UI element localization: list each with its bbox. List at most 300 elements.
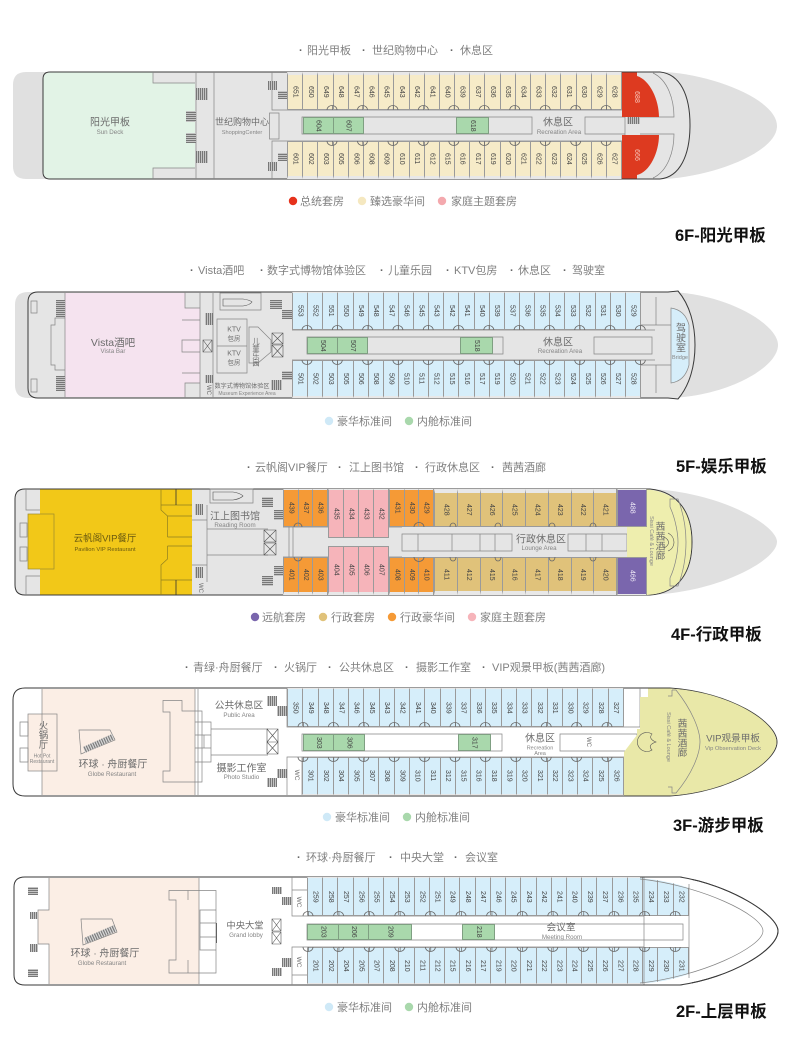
- cabin row: 5F port: [292, 292, 641, 330]
- cabin row: 6F starboard: 608: [368, 153, 375, 165]
- cabin row: 2F port: 236: [616, 891, 623, 902]
- cabin row: 6F starboard: 623: [550, 153, 557, 165]
- cabin row: 2F port: 254: [388, 891, 395, 902]
- boat icon: [223, 299, 252, 306]
- cabin row: 2F port: 245: [510, 891, 517, 902]
- structural lines: [153, 72, 674, 179]
- inner cabin 218: [462, 924, 495, 940]
- cabin row: 5F starboard: 525: [584, 373, 591, 384]
- cabin row: 2F port: 240: [571, 891, 578, 902]
- cabin row: 6F port: 649: [322, 86, 329, 98]
- cabin row: 2F port: 258: [327, 891, 334, 902]
- suite 466: [617, 557, 647, 595]
- label: WC top: WC: [295, 897, 302, 908]
- cabin row: 6F port: 629: [595, 86, 602, 98]
- cabin row: 4F starboard pink: 405: [348, 564, 354, 575]
- tagline 3F: ·: [185, 662, 189, 674]
- cabin row: 5F starboard: 517: [478, 373, 485, 384]
- structural lines: [20, 688, 640, 795]
- cabin row: 4F starboard pink: 404: [332, 564, 340, 575]
- suite 666: [622, 135, 659, 178]
- inner cabin 618: [456, 117, 489, 134]
- cabin row: 5F port: 533: [569, 305, 576, 317]
- inner cabin 317: 317: [470, 737, 478, 748]
- cabin row: 3F starboard: 310: [414, 770, 421, 782]
- tagline 2F: ·: [389, 852, 393, 864]
- door arcs: [303, 912, 680, 952]
- cabin row: 5F port: 550: [342, 305, 349, 317]
- tagline 5F: ·: [380, 265, 384, 277]
- cabin row: 5F port: 547: [387, 305, 394, 317]
- label: KTV rooms: 包房: [228, 358, 240, 366]
- lift boxes: [264, 530, 276, 555]
- legend 3F: 内舱标准间: [415, 810, 470, 824]
- structural lines: [51, 292, 671, 398]
- cabin row: 5F starboard: 502: [312, 373, 319, 384]
- cabin row: 6F port: 651: [292, 86, 299, 98]
- tagline 6F: ·: [299, 45, 303, 57]
- tagline 4F: ·: [491, 462, 495, 474]
- panel: 6F sun deck plan: [13, 72, 777, 180]
- cabin row: 2F starboard: 223: [555, 960, 562, 971]
- cabin row: 3F starboard: 305: [352, 770, 359, 782]
- cabin row: 4F starboard orange: 403: [317, 569, 324, 581]
- label: VIP restaurant: 云帆阁VIP餐厅: [74, 532, 137, 544]
- label: sun deck: Sun Deck: [97, 129, 124, 136]
- cabin row: 6F port: 635: [504, 86, 511, 98]
- cabin row: 6F port: 641: [428, 86, 435, 98]
- cabin row: 3F port: 334: [505, 702, 512, 713]
- tagline 2F: 中央大堂: [400, 850, 444, 864]
- label: KTV rooms: 包房: [228, 334, 240, 342]
- label: recreation area: [538, 336, 583, 355]
- tagline 3F: ·: [482, 662, 486, 674]
- legend 6F: 家庭主题套房: [451, 194, 517, 208]
- cabin row: 2F port: 246: [494, 891, 501, 902]
- cabin row: 5F starboard: 528: [629, 373, 636, 384]
- label: globe restaurant: 环球 · 舟厨餐厅: [71, 946, 139, 960]
- cabin row: 4F port pink: 433: [362, 508, 370, 519]
- cabin row: 6F port: 639: [459, 86, 466, 98]
- cabin row: 5F port: 548: [372, 305, 379, 317]
- cabin row: 4F starboard tan: 419: [579, 569, 586, 580]
- cabin row: 5F port: 552: [312, 305, 319, 317]
- suite 488: 488: [628, 502, 636, 514]
- label: recreation area: Recreation Area: [537, 129, 582, 136]
- cabin row: 2F starboard: 212: [434, 960, 440, 971]
- cabin row: 5F starboard: 516: [463, 373, 470, 384]
- cabin row: 4F port pink: 434: [348, 508, 354, 519]
- cabin row: 4F port tan: 427: [465, 504, 472, 515]
- tagline 4F: ·: [338, 462, 342, 474]
- cabin row: 3F port: 339: [444, 702, 451, 713]
- tagline 5F: 驾驶室: [572, 263, 605, 277]
- cabin row: 2F starboard: 219: [494, 960, 501, 971]
- cabin row: 5F port: 532: [584, 305, 591, 317]
- hull and public areas 5F: [15, 290, 778, 400]
- cabin row: 3F port: 328: [597, 702, 604, 713]
- legend 4F: 家庭主题套房: [480, 610, 546, 624]
- tagline 5F: ·: [260, 265, 264, 277]
- cabin row: 3F port: 333: [521, 702, 528, 713]
- cabin row: 4F port tan: 422: [579, 504, 586, 515]
- tagline 3F: 摄影工作室: [416, 660, 471, 674]
- label: museum area: Museum Experience Area: [218, 391, 276, 397]
- label: public area: 公共休息区: [215, 698, 264, 712]
- cabin row: 6F starboard: 616: [459, 153, 466, 165]
- cabin row: 2F port: 239: [586, 891, 593, 902]
- cabin row: 4F starboard tan: 416: [511, 569, 518, 580]
- inner cabins 303 306: 306: [345, 737, 352, 748]
- label: recreation: [525, 732, 555, 757]
- label: lounge: 行政休息区: [516, 532, 566, 546]
- label: reading room: 江上图书馆: [210, 510, 260, 522]
- cabin row: 5F port: 535: [539, 305, 546, 317]
- cabin row: 3F port: 332: [536, 702, 543, 713]
- restaurant annex: [28, 514, 54, 569]
- cabin row: 3F port: 337: [460, 702, 467, 713]
- cabin row: 5F starboard: 522: [539, 373, 546, 384]
- tagline 5F: ·: [446, 265, 450, 277]
- hull outline: [13, 688, 777, 796]
- cabin row: 4F starboard tan: 417: [533, 569, 540, 580]
- cabin row: 5F port: 534: [554, 305, 561, 317]
- cabin row: 5F port: 536: [523, 305, 530, 317]
- cabin row: 4F port tan: 428: [442, 504, 449, 515]
- label: sun deck: 阳光甲板: [90, 116, 130, 128]
- cabin row: 2F port: 234: [647, 891, 654, 902]
- cabin row: 2F starboard: 231: [677, 960, 684, 971]
- small windows: [31, 301, 37, 392]
- cabin row: 2F starboard: 227: [616, 960, 623, 971]
- cabin row: 5F port: 530: [614, 305, 621, 317]
- cabin row: 6F port: 646: [368, 86, 375, 98]
- hot pot restaurant: Hot Pot: [34, 754, 51, 760]
- cabin row: 5F port: 545: [418, 305, 425, 317]
- tagline 3F: ·: [274, 662, 278, 674]
- cabin row: 4F starboard tan: 418: [556, 569, 563, 580]
- cabin row: 3F port: 349: [307, 702, 314, 713]
- cabin row: 3F port: 342: [398, 702, 406, 713]
- cabin row: 5F starboard: 515: [448, 373, 455, 384]
- cabin row: 5F starboard: 527: [614, 373, 621, 384]
- cabin row: 4F starboard orange: [283, 557, 328, 595]
- legend 4F: 行政套房: [331, 610, 375, 624]
- inner cabins 504 507: 507: [349, 340, 356, 351]
- tagline 2F: 会议室: [465, 850, 498, 864]
- hull and public areas 2F: [14, 876, 778, 986]
- tagline 4F: ·: [415, 462, 419, 474]
- door arcs 4F: [294, 522, 596, 562]
- sun deck area: [44, 72, 195, 178]
- cabin row: 3F port: 350: [292, 702, 299, 713]
- cabin row: 3F starboard: 324: [582, 770, 589, 782]
- tagline 5F: KTV包房: [454, 264, 497, 277]
- cabin row: 3F port: 345: [368, 702, 375, 713]
- label: lounge: [516, 532, 566, 552]
- cabin row: 2F port: 249: [449, 891, 456, 902]
- cabin row: 5F port: 542: [448, 305, 455, 317]
- cabin row: 5F starboard: 501: [297, 373, 304, 384]
- cabin row: 3F starboard: 309: [398, 770, 405, 782]
- label: photo studio: [216, 762, 266, 781]
- lift boxes: [267, 729, 278, 754]
- label: vista bar: Vista Bar: [100, 348, 126, 355]
- structural lines: [161, 489, 192, 595]
- cabin row: 6F starboard: 605: [337, 153, 344, 165]
- label: globe restaurant: [71, 946, 139, 967]
- cabin row: 3F starboard: 311: [429, 770, 436, 782]
- cabin row: 4F starboard orange: 401: [287, 569, 294, 581]
- cabin row: 5F starboard: 506: [357, 373, 364, 384]
- tagline 3F: ·: [328, 662, 332, 674]
- cabin row: 6F port: 643: [398, 86, 405, 98]
- hull outline: [15, 489, 692, 595]
- label: recreation: Area: [534, 751, 547, 757]
- cabin row: 6F starboard: 619: [489, 153, 496, 165]
- cabin row: 6F starboard: 603: [322, 153, 329, 165]
- cabin row: 6F starboard: 620: [504, 153, 511, 165]
- cabin row: 5F port: 546: [402, 305, 409, 317]
- cabin row: 3F port: 347: [337, 702, 344, 713]
- cabin row: 2F starboard: 229: [647, 960, 654, 971]
- cabin row: 4F port pink: 432: [378, 508, 384, 519]
- suite 488: [617, 489, 647, 527]
- cabin row: 4F port tan: 425: [511, 504, 518, 515]
- grand stair icon: [79, 730, 115, 754]
- tagline 4F: 行政休息区: [425, 460, 480, 474]
- cabin row: 2F starboard: 228: [632, 960, 639, 971]
- legend 5F: 豪华标准间: [337, 414, 392, 428]
- hull outline: [43, 72, 690, 179]
- inner cabins 604 607: 604: [314, 120, 322, 131]
- cabin row: 6F port: 645: [383, 86, 390, 98]
- label: VIP observation deck: VIP观景甲板: [706, 732, 760, 744]
- grand stair icon: [81, 919, 117, 945]
- cabin row: 2F starboard: 207: [373, 960, 380, 971]
- label: globe restaurant: 环球 · 舟厨餐厅: [79, 758, 147, 770]
- label: VIP observation deck: Vip Observation Deck: [705, 746, 761, 752]
- cabin row: 3F port: 340: [429, 702, 436, 713]
- cabin row: 4F port orange: 436: [317, 502, 324, 514]
- label: shopping center: [215, 116, 269, 136]
- cabin row: 3F port: [287, 688, 624, 727]
- globe restaurant area: [42, 689, 195, 795]
- globe restaurant area: [38, 878, 199, 984]
- cabin row: 5F starboard: 526: [599, 373, 606, 384]
- cabin row: 5F starboard: 523: [554, 373, 561, 384]
- legend 3F: 豪华标准间: [335, 810, 390, 824]
- title 5F: 5F-娱乐甲板: [676, 457, 767, 476]
- cabin row: 6F port: 650: [307, 86, 314, 98]
- legend 2F: 豪华标准间: [337, 1000, 392, 1014]
- hot pot restaurant: [28, 714, 57, 771]
- inner cabin 317: [458, 734, 490, 751]
- label: VIP observation deck: [705, 732, 761, 752]
- cabin row: 6F starboard: 622: [535, 153, 542, 165]
- cabin row: 6F port: 637: [474, 86, 481, 98]
- inner cabins 203 206 209: [307, 924, 412, 940]
- cabin row: 5F starboard: 509: [387, 373, 394, 384]
- lift boxes: [203, 333, 283, 357]
- label: recreation area: [537, 116, 582, 136]
- cabin row: 6F port: 633: [535, 86, 542, 98]
- hot pot restaurant: 火锅厅: [36, 721, 48, 749]
- cabin row: 2F port: 256: [357, 891, 364, 902]
- inner cabins 303 306: [302, 734, 364, 751]
- legend 4F: [251, 610, 546, 624]
- label: KTV rooms: KTV: [227, 350, 241, 358]
- tagline 2F: ·: [454, 852, 458, 864]
- inner cabin 518: 518: [473, 340, 480, 351]
- structural lines: [38, 877, 683, 985]
- cabin row: 6F starboard: 627: [611, 153, 618, 165]
- label: meeting room: [542, 920, 582, 941]
- door arcs 5F: [302, 325, 646, 365]
- bow backdrop: [650, 489, 777, 595]
- cabin row: 2F starboard: 220: [510, 960, 517, 971]
- cabin row: 4F starboard tan: 412: [465, 569, 472, 580]
- cabin row: 6F starboard: 624: [565, 153, 572, 165]
- inner cabin 518: [460, 337, 493, 354]
- cabin row: 2F port: 242: [540, 891, 547, 902]
- cabin row: 4F port pink: 435: [332, 508, 340, 519]
- label: grand lobby: [226, 920, 264, 939]
- tagline 2F: ·: [297, 852, 301, 864]
- cabin row: 6F port: 648: [337, 86, 344, 98]
- bow lounge: 茜茜酒廊: [676, 718, 687, 758]
- label: reading room: [210, 510, 260, 529]
- cabin row: 2F starboard: [307, 947, 689, 984]
- cabin row: 3F starboard: 316: [475, 770, 482, 782]
- cabin row: 5F port: 551: [327, 305, 334, 317]
- tagline 6F: 休息区: [460, 43, 493, 57]
- cabin row: 6F port: 647: [352, 86, 359, 98]
- legend 6F: [289, 194, 517, 208]
- cabin row: 3F starboard: 326: [612, 770, 619, 782]
- cabin row: 3F port: 331: [551, 702, 558, 713]
- cabin row: 5F starboard: 508: [372, 373, 379, 384]
- label: globe restaurant: Globe Restaurant: [78, 960, 127, 967]
- suites and door arcs 6F: [326, 72, 659, 178]
- inner cabins 203 206 209: 203: [319, 926, 326, 938]
- label: recreation area: 休息区: [543, 336, 573, 348]
- cabin row: 4F port tan: 421: [602, 504, 609, 515]
- cabin row: 2F port: 235: [632, 891, 639, 902]
- cabin row: 3F starboard: 315: [459, 770, 466, 782]
- tagline 2F: 环球·舟厨餐厅: [306, 850, 376, 864]
- cabin row: 4F starboard tan: [434, 557, 617, 595]
- cabin row: 3F port: 336: [475, 702, 482, 713]
- cabin row: 2F port: 259: [312, 891, 319, 902]
- cabin row: 3F starboard: 325: [597, 770, 604, 782]
- legend 2F: 内舱标准间: [417, 1000, 472, 1014]
- cabin row: 2F starboard: 202: [327, 960, 334, 971]
- panel: 2F upper deck plan: [14, 876, 778, 986]
- label: globe restaurant: [79, 758, 147, 778]
- label: kids club: 儿童乐园: [252, 338, 261, 368]
- cabin row: 4F starboard orange aft: [389, 557, 434, 595]
- label: meeting room: Meeting Room: [542, 934, 582, 941]
- cabin row: 5F port: 531: [599, 305, 606, 317]
- cabin row: 2F port: 255: [373, 891, 380, 902]
- tagline 3F: VIP观景甲板(茜茜酒廊): [492, 660, 605, 674]
- inner cabins 504 507: [307, 337, 368, 354]
- label: sun deck: [90, 116, 130, 136]
- cabin row: 3F port: 346: [353, 702, 360, 713]
- tagline 6F: ·: [450, 45, 454, 57]
- cabin row: 5F port: 541: [463, 305, 470, 317]
- cabin row: 5F starboard: 520: [508, 373, 515, 384]
- tagline 5F: Vista酒吧: [198, 264, 244, 277]
- bow curves and door arcs 2F: [302, 876, 778, 986]
- label: WC: WC: [205, 385, 211, 396]
- cabin row: 4F starboard orange aft: 408: [393, 569, 400, 581]
- cabin row: 5F starboard: 511: [418, 373, 425, 384]
- bow and stern backdrop: [13, 72, 777, 179]
- label: recreation area: Recreation Area: [538, 348, 583, 355]
- tagline 5F: ·: [563, 265, 567, 277]
- cabin row: 4F starboard pink: 406: [362, 564, 370, 575]
- cabin row: 3F starboard: 302: [322, 770, 329, 782]
- suite 688: 688: [633, 91, 640, 103]
- tagline 6F: 世纪购物中心: [372, 43, 438, 57]
- panel: 4F executive deck plan: [14, 488, 777, 596]
- label: WC bottom: WC: [295, 957, 302, 968]
- label: public area: [215, 698, 264, 719]
- cabin row: 3F starboard: 301: [307, 770, 314, 782]
- panel: 5F entertainment deck plan: [15, 290, 778, 400]
- cafe lounge: 茜茜酒廊: [654, 521, 665, 561]
- cabin row: 2F port: 251: [434, 891, 440, 902]
- door arcs 3F: [298, 722, 612, 762]
- tagline 4F: ·: [247, 462, 251, 474]
- cabin row: 5F port: 540: [478, 305, 485, 317]
- cabin row: 6F starboard: 621: [519, 153, 526, 165]
- cabin row: 3F starboard: 321: [536, 770, 543, 782]
- cabin row: 2F starboard: 201: [312, 960, 319, 971]
- cabin row: 2F starboard: 230: [662, 960, 669, 971]
- cabin row: 6F port: 630: [580, 86, 587, 98]
- stairs: [28, 887, 292, 977]
- label: VIP restaurant: [74, 532, 137, 553]
- cabin row: 2F starboard: 211: [418, 960, 425, 971]
- cabin row: 4F port pink: [328, 489, 389, 538]
- cabin row: 5F starboard: 524: [569, 373, 576, 384]
- cabin row: 3F port: 329: [582, 702, 589, 713]
- legend 2F: [325, 1000, 472, 1014]
- hot pot restaurant: Restaurant: [30, 759, 55, 765]
- cabin row: 2F port: 257: [342, 891, 349, 902]
- label: KTV rooms: KTV: [227, 326, 241, 334]
- cabin row: 6F port: 634: [519, 86, 526, 98]
- label: photo studio: Photo Studio: [224, 774, 260, 781]
- label: WC: WC: [293, 770, 300, 781]
- cabin row: 5F starboard: 512: [433, 373, 440, 384]
- label: recreation: 休息区: [525, 732, 555, 744]
- cabin row: 5F port: 549: [357, 305, 364, 317]
- label: grand lobby: 中央大堂: [226, 920, 264, 930]
- cabin row: 2F starboard: 226: [601, 960, 608, 971]
- VIP restaurant area: [40, 490, 192, 594]
- label: shopping center: ShoppingCenter: [222, 130, 262, 136]
- cabin row: 6F starboard: 617: [474, 153, 481, 165]
- cabin row: 3F port: 335: [490, 702, 497, 713]
- cabin row: 4F starboard orange aft: 409: [408, 569, 415, 581]
- cabin row: 2F starboard: 205: [357, 960, 364, 971]
- cabin row: 4F starboard tan: 420: [602, 569, 609, 580]
- stairs: [195, 497, 283, 586]
